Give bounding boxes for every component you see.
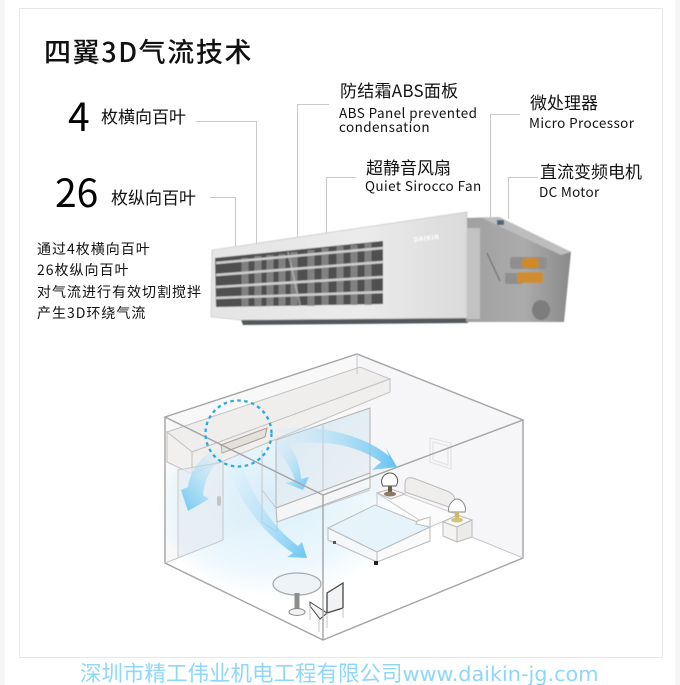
unit copper pipes (505, 257, 547, 284)
callout: ABS panel: ABS Panel prevented (339, 102, 477, 122)
callout: ABS panel: condensation (339, 116, 430, 136)
callout: ABS panel (298, 77, 477, 241)
duct unit illustration (211, 212, 571, 325)
dotted highlight circle (206, 400, 272, 466)
description text (37, 239, 202, 323)
callout: 26 vertical louvers: 枚纵向百叶 (111, 184, 196, 209)
title: 四翼3D气流技术 (44, 31, 253, 70)
callout: DC motor: 直流变频电机 (540, 158, 642, 183)
unit front panel (211, 212, 467, 320)
airflow arrow: left (181, 447, 232, 511)
unit side panel (466, 217, 571, 322)
description text: 26枚纵向百叶 (37, 260, 130, 280)
callout: 26 vertical louvers: 26 (55, 163, 98, 219)
closet (262, 408, 370, 532)
beam (167, 367, 390, 474)
picture on wall (430, 438, 451, 469)
DAIKIN logo: DAIKIN (413, 231, 440, 244)
nightstands (377, 489, 472, 542)
description text: 通过4枚横向百叶 (37, 239, 151, 259)
callout: ABS panel: 防结霜ABS面板 (340, 77, 458, 102)
room back walls fill (165, 354, 523, 640)
callout: micro processor (490, 89, 635, 217)
callout: 4 horizontal louvers (68, 87, 256, 246)
callout: quiet sirocco fan (326, 154, 482, 234)
callout: micro processor: Micro Processor (529, 112, 635, 132)
unit underside (240, 317, 468, 325)
chair (310, 583, 343, 632)
callout: 26 vertical louvers (55, 163, 236, 252)
unit motor (532, 300, 550, 320)
callout: 4 horizontal louvers: 4 (68, 87, 90, 143)
lamps (382, 473, 465, 522)
room illustration (164, 354, 523, 640)
vent in beam (221, 428, 267, 453)
door (178, 462, 223, 558)
description text: 对气流进行有效切割搅拌 (37, 282, 202, 302)
ambient airflow glow (164, 426, 400, 594)
callout: micro processor: 微处理器 (530, 89, 598, 114)
room wire frame (165, 354, 523, 640)
airflow arrow: down (226, 455, 307, 558)
callout: quiet sirocco fan: 超静音风扇 (366, 154, 451, 179)
callout: quiet sirocco fan: Quiet Sirocco Fan (365, 175, 482, 195)
description text: 产生3D环绕气流 (37, 303, 146, 323)
louver window (215, 241, 383, 307)
airflow arrow: right (275, 427, 397, 470)
table (273, 573, 321, 616)
callout: DC motor: DC Motor (539, 181, 600, 201)
callout: 4 horizontal louvers: 枚横向百叶 (101, 103, 186, 128)
callout: DC motor (508, 158, 642, 219)
airflow arrow: center (272, 440, 309, 490)
bed (328, 478, 458, 565)
